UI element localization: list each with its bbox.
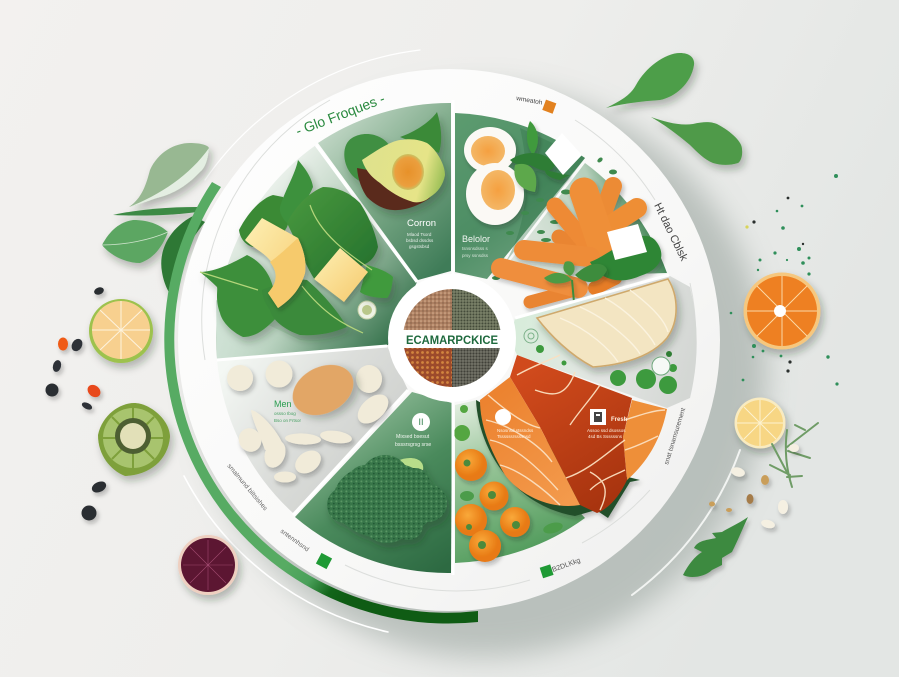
salmon labels: 4sd Bs Ssssssns — [588, 434, 623, 439]
plate shadow — [197, 87, 767, 657]
fruit: blood orange — [178, 535, 238, 595]
label: Belolor — [462, 234, 490, 258]
panel: spinach and cheese sector — [200, 145, 417, 359]
rim label: green marker bottom: B2DLKkg — [551, 557, 582, 574]
panel: cheese wedge sector — [510, 275, 697, 408]
cream wedge — [537, 279, 676, 367]
panel: broccoli sector — [295, 392, 452, 573]
label: Belolor: Belolor — [462, 234, 490, 244]
white label square — [545, 133, 582, 175]
plate disc — [178, 69, 720, 611]
icon: circle badge — [524, 329, 538, 343]
salmon labels: Tssssssrssssnsd — [497, 434, 531, 439]
seeds and nuts — [709, 444, 799, 530]
dark beans left — [46, 286, 108, 520]
label: Corron: gsgstsbsd — [409, 244, 430, 249]
fat lines — [486, 355, 665, 510]
wedge ridges — [560, 290, 668, 362]
label: broccoli: bsssrsgrsg srse — [395, 442, 431, 448]
rim label: lower right: snat tsnamsurement — [663, 407, 687, 466]
sector dividers — [452, 100, 454, 575]
label: Corron: Mlaod Tsord — [407, 232, 432, 237]
icon: salmon circle badge — [495, 409, 511, 425]
leaves top left — [102, 143, 209, 296]
salmon labels: Fresh — [611, 417, 628, 423]
rim label: green marker left: sntennhsnd — [279, 528, 310, 554]
basil sprig — [544, 261, 607, 302]
decorative outer arcs — [184, 50, 740, 632]
beans — [227, 360, 394, 482]
salmon labels — [497, 417, 628, 439]
herb sprig — [770, 423, 818, 487]
label: Men — [274, 399, 302, 423]
salmon right slice — [623, 400, 667, 480]
speckle dots dark — [745, 197, 804, 373]
rim label: lower left text: smalmund biltsishes — [225, 463, 269, 513]
eggs — [464, 127, 524, 225]
white label square — [607, 224, 647, 260]
salmon labels: Assoo ssd dsossos — [587, 428, 626, 433]
rim label: Glo Froques: - Glo Froques - — [293, 90, 387, 139]
avocado — [344, 112, 445, 210]
spinach leaves — [200, 160, 393, 337]
label: Corron: bsbsd dssdss — [406, 238, 434, 243]
fruit: lime slice — [89, 299, 153, 363]
panel: carrots sector — [492, 157, 667, 302]
peas — [536, 345, 677, 394]
green leaf — [590, 236, 661, 280]
seeds — [492, 157, 617, 280]
small leaves — [460, 491, 564, 535]
tomato stems — [464, 460, 520, 549]
salmon middle slice — [510, 355, 632, 513]
label: Corron — [406, 218, 436, 249]
salmon dark rim — [476, 400, 640, 518]
icon: white circle badge: II — [418, 417, 424, 427]
peas — [454, 405, 470, 441]
label: Belolor: tsnsnsdsss s — [462, 246, 489, 251]
green accent arc — [164, 182, 478, 624]
label: Men: ossso Ibog — [274, 411, 296, 416]
speckle dots right — [730, 174, 839, 386]
rim label: orange marker: wmeatoh — [515, 95, 543, 107]
fruit: kiwi slice — [98, 403, 170, 476]
inner plate ring lines — [202, 100, 696, 591]
icon: salmon square badge — [590, 409, 606, 425]
salmon labels: Nsosnsd stssndss — [497, 428, 534, 433]
center circle with grains — [388, 274, 516, 402]
label: broccoli: Mixsed bsesut — [396, 434, 430, 440]
icon: white circle badge — [412, 413, 430, 431]
label: Belolor: prsy ssnsdss — [462, 253, 489, 258]
label: Men: Men — [274, 399, 292, 409]
tomatoes — [455, 449, 530, 562]
fruit: lemon slice — [734, 398, 786, 448]
panel: beans sector — [217, 346, 408, 515]
center title: ECAMARPCKICE — [406, 335, 498, 347]
label: Corron: Corron — [407, 218, 436, 229]
panel: avocado sector — [318, 103, 451, 280]
icon: white badge — [652, 357, 670, 375]
rim label: right top: Ht dao Cblsk — [651, 201, 690, 263]
label: Men: Bso on Frtsor — [274, 418, 302, 423]
large nut — [284, 355, 362, 425]
panel: salmon — [476, 355, 667, 518]
panel: tomatoes sector — [454, 400, 585, 563]
fruit: orange slice — [744, 272, 820, 350]
salmon left slice — [480, 377, 580, 506]
label: broccoli — [395, 434, 431, 448]
basil leaves — [510, 121, 570, 192]
leaves top right — [606, 53, 742, 165]
rim label: green marker bottom — [540, 557, 582, 578]
rim label: green marker left — [279, 528, 332, 569]
cheese pieces — [245, 218, 368, 308]
arugula leaf — [683, 517, 748, 577]
icon: small seal — [358, 301, 376, 319]
rim label: orange marker — [515, 95, 556, 114]
carrots — [501, 186, 637, 302]
panel: eggs sector — [455, 113, 585, 279]
broccoli — [327, 455, 447, 543]
